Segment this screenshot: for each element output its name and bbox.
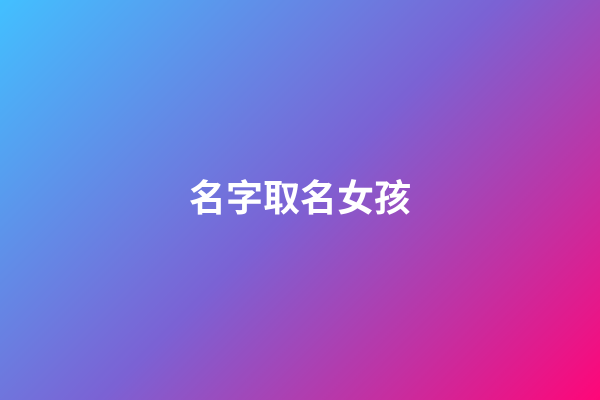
title: 名字取名女孩	[189, 178, 411, 219]
